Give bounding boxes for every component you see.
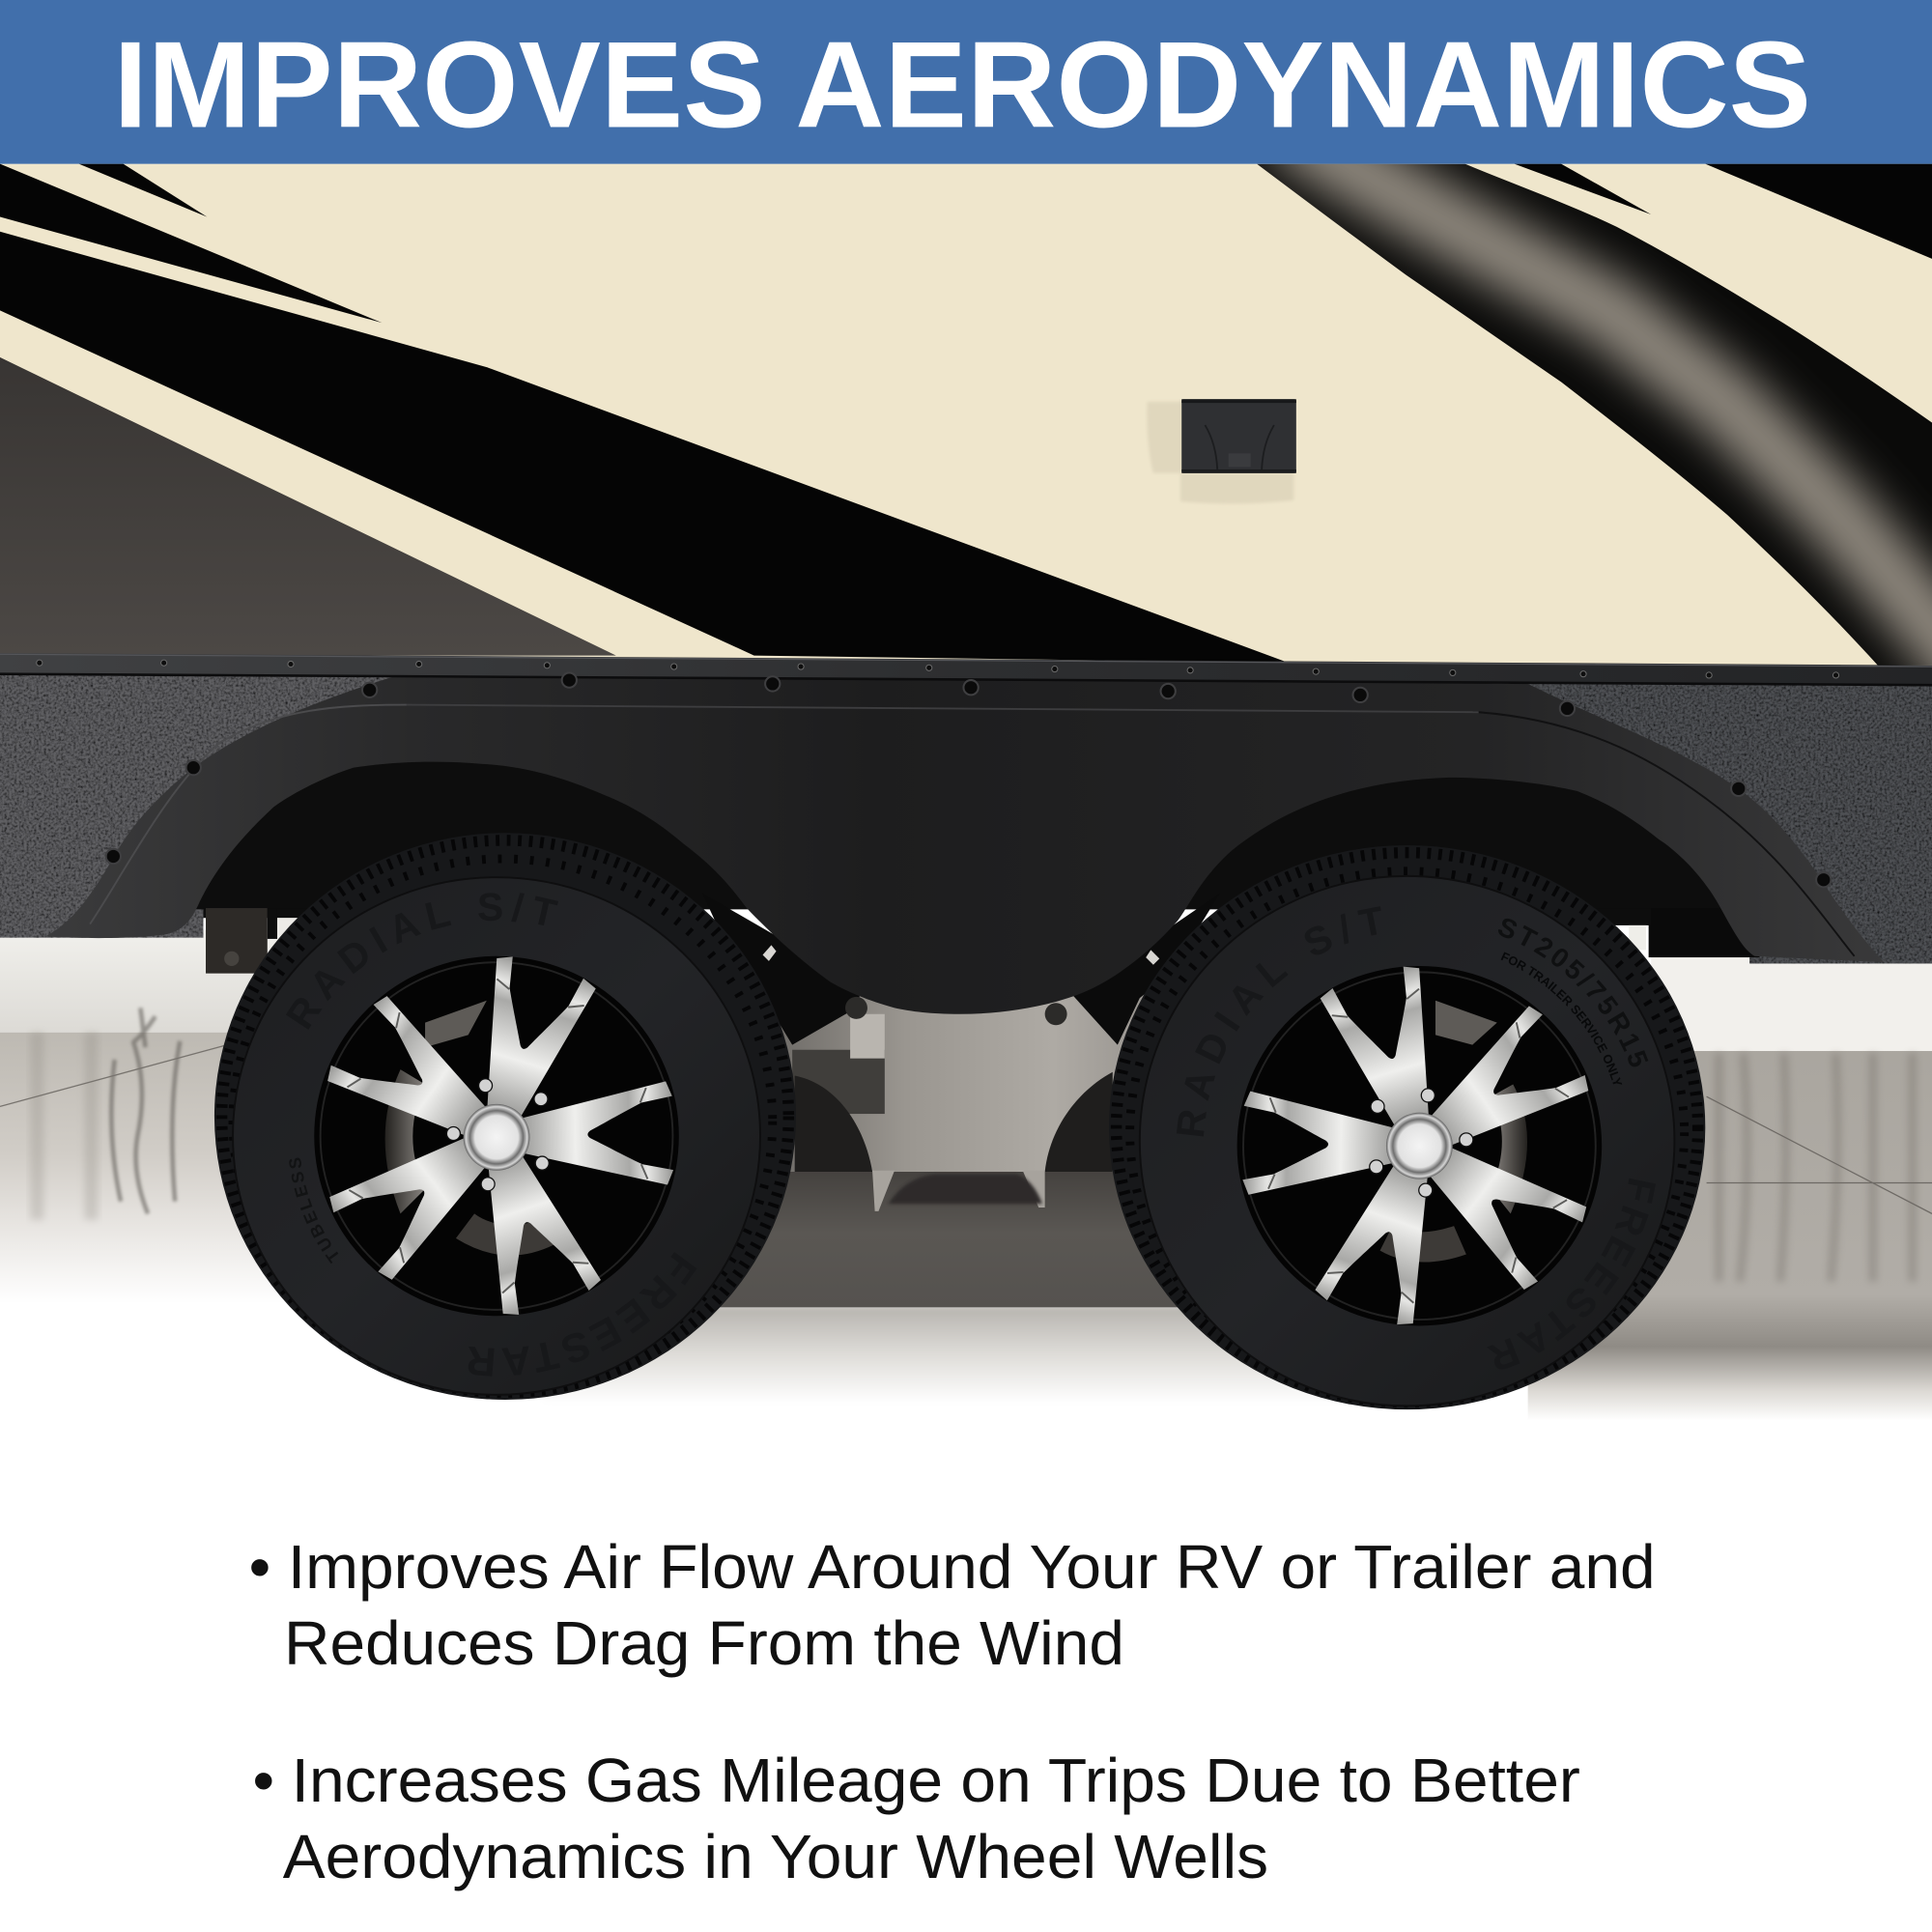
gradient swoosh decal [1257, 164, 1932, 666]
frame bracket [206, 908, 297, 974]
wheel well interior and suspension [185, 746, 1762, 1045]
brake drum window right [1491, 1084, 1527, 1213]
floor joint lines right [1707, 1096, 1932, 1213]
brake drum window upper [425, 1001, 487, 1047]
rim [314, 956, 679, 1316]
brake drum window upper [1435, 1001, 1497, 1045]
bullet one: • [249, 1532, 270, 1602]
banner background [0, 0, 1932, 164]
floor streaks left [111, 1008, 180, 1213]
spokes [323, 952, 673, 1320]
rim edge [1243, 972, 1596, 1320]
sidewall text radial: RADIAL S/T [286, 893, 558, 1030]
small black spike [79, 164, 207, 216]
bullet two: Increases Gas Mileage on Trips Due to Better [292, 1746, 1580, 1815]
benefits text [249, 1532, 1656, 1891]
dark strip beside right tyre [1596, 908, 1651, 925]
sidewall service text: FOR TRAILER SERVICE ONLY [1501, 952, 1622, 1084]
spokes [1242, 962, 1594, 1329]
pillar reflection [792, 1050, 885, 1114]
pale pillar [850, 1014, 885, 1059]
lower body side panels [0, 672, 1932, 963]
tread blocks outer [1117, 853, 1698, 1403]
sidewall [233, 877, 760, 1395]
right suspension spring [1072, 894, 1220, 1045]
top trim rail [0, 653, 1932, 685]
floor streaks right [1719, 1054, 1913, 1282]
right suspension bolt [1045, 1003, 1067, 1025]
bullet two: Aerodynamics in Your Wheel Wells [283, 1822, 1268, 1891]
bullet one [249, 1532, 1656, 1678]
brake drum window lower [456, 1213, 554, 1256]
cream side wall [0, 164, 1932, 669]
textured left side panel [0, 672, 425, 938]
left wall highlight [0, 930, 321, 1034]
right fender reflection arc [1045, 1072, 1113, 1172]
left tyre and wheel [214, 833, 796, 1400]
right frame rail [1649, 908, 1759, 957]
fender and trim [0, 653, 1932, 1014]
sidewall text brand: FREESTAR [469, 1347, 509, 1376]
sidewall size text: ST205/75R15 [1498, 919, 1648, 1066]
fender left crease [90, 705, 407, 924]
photo: RV side wall decals [0, 164, 1932, 666]
left suspension spring [702, 894, 863, 1045]
textured right side panel [1516, 684, 1932, 963]
right tyre and wheel [1109, 845, 1706, 1410]
centre floor shadow [889, 1175, 1042, 1204]
brake drum window lower [1380, 1226, 1466, 1263]
rail upper highlight [0, 654, 1932, 667]
left floor gradient [0, 1033, 321, 1303]
tread blocks inner [233, 859, 773, 1383]
lug nuts [1370, 1089, 1473, 1197]
broad floor bands left [37, 1033, 91, 1220]
left fender reflection arc [795, 1076, 872, 1172]
black decal spike upper left [0, 164, 382, 323]
bottom floor fade centre [542, 1305, 1430, 1404]
dark strip beside left tyre [203, 908, 321, 918]
wheel well fender flare [45, 672, 1884, 1014]
bullet one: Reduces Drag From the Wind [284, 1608, 1124, 1678]
rim edge [321, 962, 672, 1310]
bullet one: Improves Air Flow Around Your RV or Trailer and [288, 1532, 1656, 1602]
side wall vent cover [1181, 399, 1296, 473]
right wall highlight [1651, 955, 1932, 1054]
rail screws [37, 660, 1839, 678]
lug nuts [446, 1079, 549, 1191]
tyre outer tread [214, 833, 796, 1400]
left slit highlight [763, 945, 777, 961]
centre hub [464, 1104, 529, 1171]
right wall slit [1629, 925, 1646, 950]
rim [1237, 966, 1602, 1325]
right light lobe [1023, 1171, 1045, 1208]
right slit highlight [1146, 950, 1159, 965]
well interior [185, 746, 1762, 909]
tyre outer tread [1109, 845, 1705, 1409]
fender bolts [106, 672, 1831, 887]
rear wall between wheels [764, 974, 1158, 1173]
left light lobe [872, 1171, 895, 1211]
rail lower edge [0, 674, 1932, 685]
small black spike right [1515, 164, 1651, 214]
vent shadow [1147, 402, 1293, 503]
sidewall text radial: RADIAL S/T [1177, 906, 1381, 1136]
bullet two [252, 1746, 1580, 1891]
brake drum window left [385, 1069, 425, 1213]
tread blocks outer [222, 840, 788, 1392]
black corner decal [1705, 164, 1932, 259]
fender right crease [1479, 712, 1855, 956]
floor joint line left [0, 1043, 232, 1106]
photo: floor and background [0, 930, 1932, 1421]
reflective floor between wheels [690, 1172, 1233, 1307]
sidewall text tubeless: TUBELESS [290, 1157, 338, 1264]
title: IMPROVES AERODYNAMICS [113, 16, 1811, 154]
sidewall [1140, 876, 1674, 1406]
tread blocks inner [1130, 871, 1685, 1394]
dark grey decal triangle [0, 357, 616, 656]
bullet two: • [252, 1746, 274, 1815]
black decal stripe [0, 232, 1289, 663]
right floor gradient [1528, 1051, 1932, 1421]
sidewall text brand: FREESTAR [1479, 1174, 1664, 1382]
header banner [0, 0, 1932, 164]
centre hub [1386, 1113, 1453, 1179]
centre flange crease [407, 705, 1479, 712]
left suspension bolt [845, 997, 867, 1019]
